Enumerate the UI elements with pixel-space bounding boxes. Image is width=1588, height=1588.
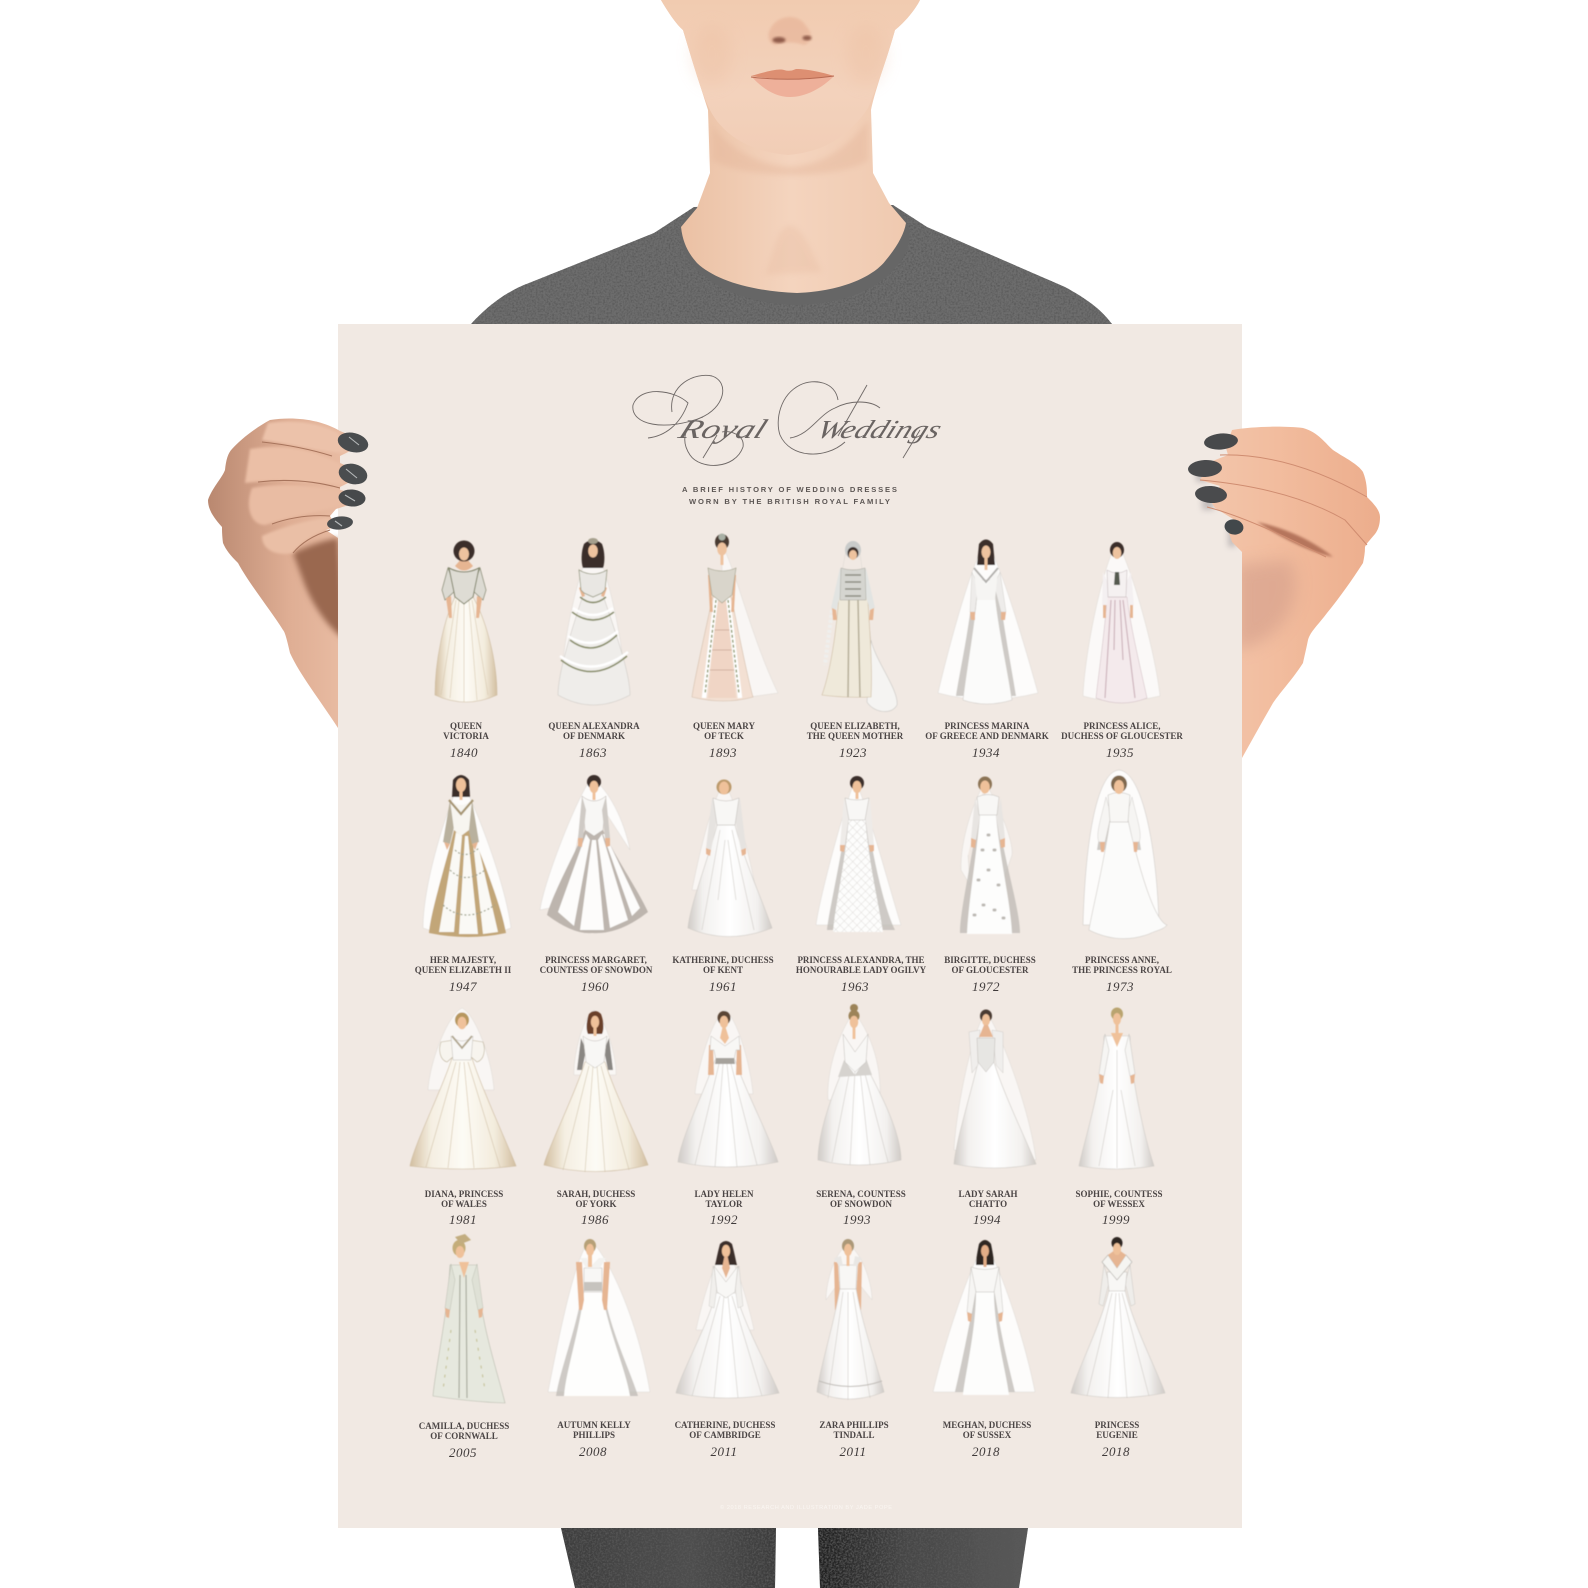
dress illustration (688, 780, 772, 936)
name: QUEEN MARY (693, 721, 755, 731)
year: 1960 (581, 979, 609, 994)
year: 2008 (579, 1444, 607, 1459)
year: 1923 (839, 745, 867, 760)
year: 1999 (1102, 1212, 1130, 1227)
dress card: Autumn Kelly Phillips 2008 (548, 1239, 650, 1459)
name: OF DENMARK (563, 731, 625, 741)
year: 1986 (581, 1212, 609, 1227)
name: PRINCESS (1095, 1420, 1139, 1430)
dress card: Queen Victoria 1840 (435, 540, 497, 760)
dress card: Princess Alice 1935 (1061, 542, 1183, 760)
year: 1934 (972, 745, 1000, 760)
dress illustration (1083, 770, 1167, 939)
title: Royal (673, 415, 771, 445)
name: THE PRINCESS ROYAL (1072, 965, 1172, 975)
name: TAYLOR (705, 1199, 743, 1209)
dress illustration (544, 1010, 648, 1172)
left hand (208, 418, 370, 728)
year: 1893 (709, 745, 737, 760)
name: DUCHESS OF GLOUCESTER (1061, 731, 1183, 741)
year: 1840 (450, 745, 478, 760)
name: SERENA, COUNTESS (816, 1189, 906, 1199)
right hand (1188, 427, 1380, 758)
name: EUGENIE (1096, 1430, 1138, 1440)
dress card: Princess Eugenie 2018 (1071, 1237, 1165, 1459)
name: PRINCESS ALICE, (1083, 721, 1161, 731)
name: THE QUEEN MOTHER (807, 731, 904, 741)
name: HER MAJESTY, (430, 955, 496, 965)
dress illustration (816, 776, 901, 932)
dress illustration (558, 538, 630, 705)
left nails (326, 430, 370, 531)
name: QUEEN ELIZABETH II (415, 965, 512, 975)
dress card: Princess Margaret 1960 (540, 775, 653, 994)
name: DIANA, PRINCESS (425, 1189, 503, 1199)
name: BIRGITTE, DUCHESS (944, 955, 1036, 965)
name: OF GLOUCESTER (952, 965, 1029, 975)
name: OF SUSSEX (963, 1430, 1012, 1440)
dress illustration (822, 541, 897, 712)
year: 1863 (579, 745, 607, 760)
person: legs (561, 1528, 1028, 1588)
copyright note: © 2018 RESEARCH AND ILLUSTRATION BY JADE POPE (720, 1504, 892, 1511)
dress illustration (423, 775, 511, 937)
dress illustration (938, 540, 1038, 704)
dress illustration (817, 1239, 884, 1400)
year: 2011 (839, 1444, 867, 1459)
dress card: Katharine, Duchess of Kent 1961 (672, 780, 774, 994)
name: PRINCESS ALEXANDRA, THE (797, 955, 925, 965)
name: KATHERINE, DUCHESS (672, 955, 774, 965)
dress card: Sophie, Countess of Wessex 1999 (1075, 1008, 1163, 1227)
name: OF SNOWDON (830, 1199, 892, 1209)
year: 2018 (1102, 1444, 1130, 1459)
dress card: Princess Alexandra 1963 (796, 776, 927, 994)
year: 1972 (972, 979, 1000, 994)
name: CHATTO (969, 1199, 1007, 1209)
dress card: Zara Phillips Tindall 2011 (817, 1239, 889, 1459)
dress illustration (433, 1234, 505, 1403)
name: PRINCESS MARGARET, (545, 955, 647, 965)
dress card: Lady Sarah Chatto 1994 (954, 1010, 1036, 1227)
subtitle: WORN BY THE BRITISH ROYAL FAMILY (689, 497, 890, 506)
dress card: Princess Anne 1973 (1072, 770, 1172, 994)
name: MEGHAN, DUCHESS (943, 1420, 1031, 1430)
dress illustration (1083, 542, 1160, 703)
mouth (751, 69, 834, 97)
name: OF WALES (441, 1199, 487, 1209)
title: Weddings (813, 415, 946, 444)
name: SARAH, DUCHESS (557, 1189, 635, 1199)
name: OF YORK (575, 1199, 617, 1209)
name: PHILLIPS (573, 1430, 615, 1440)
name: TINDALL (833, 1430, 875, 1440)
year: 1947 (449, 979, 477, 994)
name: ZARA PHILLIPS (819, 1420, 889, 1430)
name: CATHERINE, DUCHESS (675, 1420, 775, 1430)
dress card: Birgitte, Duchess of Gloucester 1972 (944, 776, 1036, 994)
dress illustration (540, 775, 648, 933)
name: LADY HELEN (695, 1189, 754, 1199)
name: OF CAMBRIDGE (689, 1430, 761, 1440)
year: 2018 (972, 1444, 1000, 1459)
dress illustration (960, 776, 1020, 934)
dress card: Her Majesty, Queen Elizabeth II 1947 (415, 775, 512, 994)
dress card: Sarah, Duchess of York 1986 (544, 1010, 648, 1227)
dress illustration (435, 540, 497, 702)
name: AUTUMN KELLY (557, 1420, 631, 1430)
year: 1992 (710, 1212, 738, 1227)
name: COUNTESS OF SNOWDON (540, 965, 653, 975)
name: QUEEN ALEXANDRA (548, 721, 640, 731)
year: 1935 (1106, 745, 1134, 760)
dress illustration (548, 1239, 650, 1396)
year: 2011 (710, 1444, 738, 1459)
dress card: Catherine, Duchess of Cambridge 2011 (675, 1241, 779, 1459)
dress illustration (954, 1010, 1036, 1168)
dress illustration (1079, 1008, 1154, 1169)
name: OF KENT (703, 965, 743, 975)
name: HONOURABLE LADY OGILVY (796, 965, 927, 975)
dress illustration (818, 1004, 901, 1165)
name: OF GREECE AND DENMARK (925, 731, 1049, 741)
name: OF CORNWALL (430, 1431, 498, 1441)
dress card: Queen Alexandra 1863 (548, 538, 640, 760)
year: 1993 (843, 1212, 871, 1227)
dress card: Diana, Princess of Wales 1981 (410, 1008, 516, 1227)
dress card: Lady Helen Taylor 1992 (678, 1010, 778, 1227)
name: QUEEN ELIZABETH, (810, 721, 900, 731)
name: PRINCESS MARINA (945, 721, 1030, 731)
name: OF TECK (704, 731, 744, 741)
dress illustration (1071, 1237, 1165, 1398)
title (633, 375, 946, 465)
nose (769, 17, 812, 45)
dress card: Camilla, Duchess of Cornwall 2005 (419, 1234, 509, 1460)
name: SOPHIE, COUNTESS (1075, 1189, 1163, 1199)
name: QUEEN (450, 721, 482, 731)
person: grey t-shirt (471, 205, 1112, 324)
dress card: Meghan, Duchess of Sussex 2018 (933, 1240, 1035, 1459)
right nails (1188, 432, 1245, 536)
dress card: Queen Mary 1893 (692, 534, 778, 760)
poster sheet (338, 324, 1242, 1528)
subtitle: A BRIEF HISTORY OF WEDDING DRESSES (682, 485, 897, 494)
dress illustration (933, 1240, 1035, 1395)
name: VICTORIA (443, 731, 489, 741)
year: 2005 (449, 1445, 477, 1460)
year: 1963 (841, 979, 869, 994)
dress card: Queen Elizabeth, the Queen Mother 1923 (807, 541, 904, 760)
dress illustration (676, 1241, 779, 1398)
year: 1994 (973, 1212, 1001, 1227)
name: LADY SARAH (959, 1189, 1017, 1199)
dress illustration (410, 1008, 516, 1169)
name: PRINCESS ANNE, (1085, 955, 1159, 965)
dress illustration (678, 1010, 778, 1167)
name: OF WESSEX (1093, 1199, 1145, 1209)
year: 1961 (709, 979, 737, 994)
name: CAMILLA, DUCHESS (419, 1421, 509, 1431)
dress card: Princess Marina 1934 (925, 540, 1049, 760)
dress illustration (692, 534, 778, 701)
year: 1981 (449, 1212, 477, 1227)
dress card: Serena, Countess of Snowdon 1993 (816, 1004, 906, 1227)
person: face and neck (661, 0, 920, 293)
year: 1973 (1106, 979, 1134, 994)
